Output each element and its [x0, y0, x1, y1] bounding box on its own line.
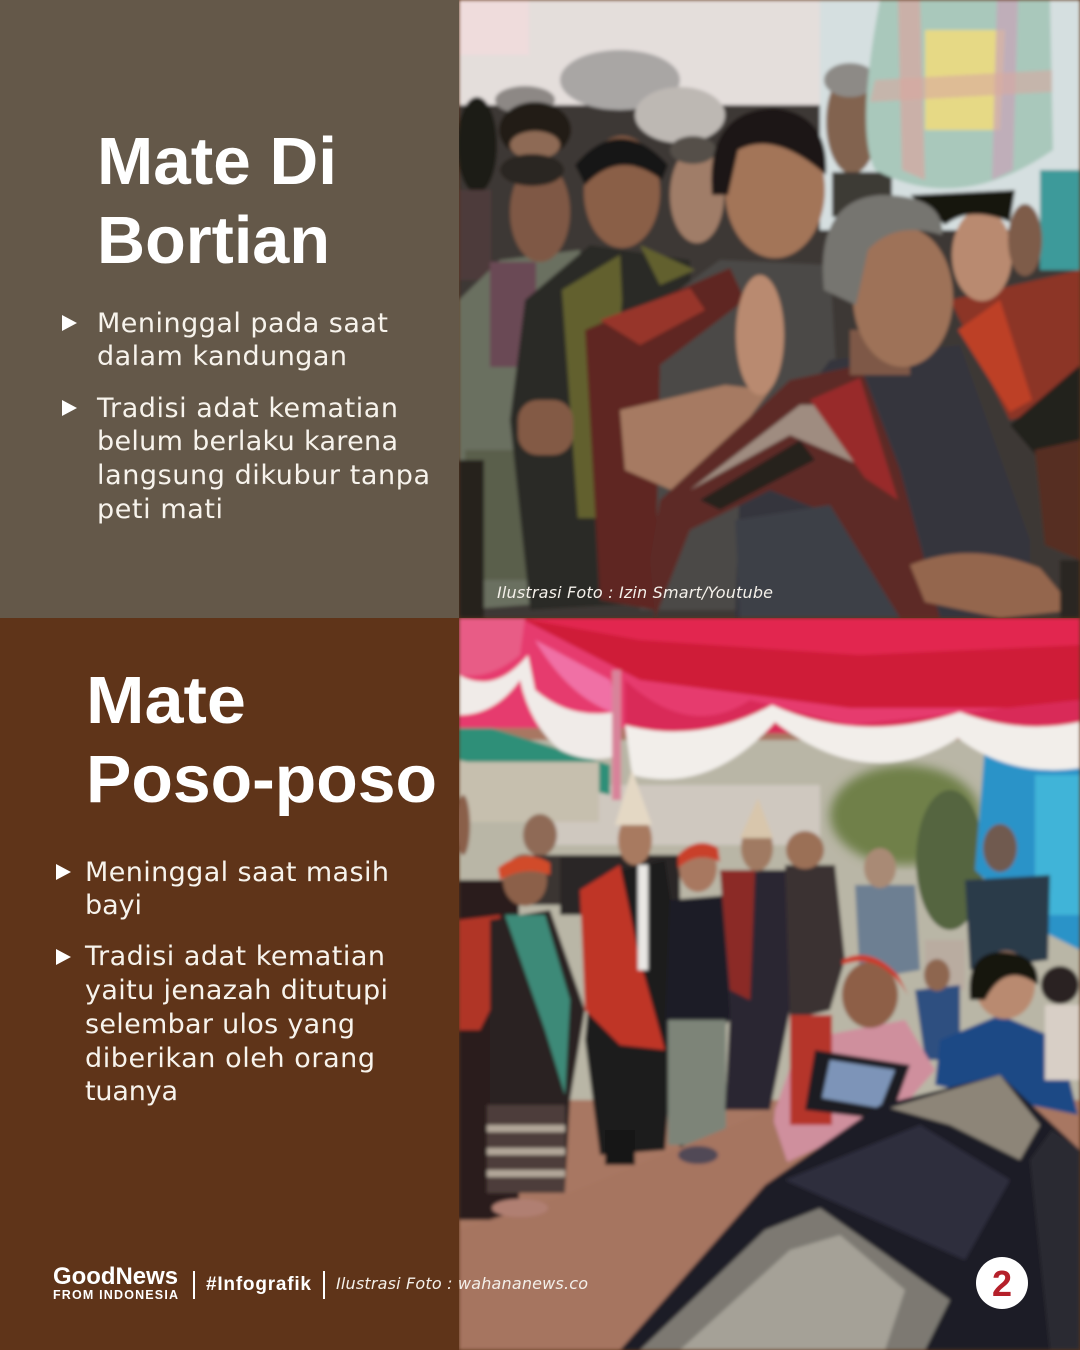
- woman in dark dress: [666, 894, 734, 1149]
- photo: mourners in ulos shawls: [457, 0, 1080, 618]
- title: Mate Poso-poso: Mate: [86, 663, 246, 738]
- logo: GoodNews from Indonesia: FROM INDONESIA: [53, 1288, 178, 1302]
- seated women: [770, 1020, 935, 1170]
- bullet list: Mate Di Bortian: langsung dikubur tanpa: [97, 460, 430, 491]
- further mourners: [785, 865, 845, 1020]
- bullet list: Mate Di Bortian: Tradisi adat kematian: [96, 393, 398, 424]
- bullet list: Mate Di Bortian: belum berlaku karena: [97, 426, 398, 457]
- title: Mate Di Bortian: Mate Di: [97, 124, 337, 199]
- man in red jacket: [720, 870, 790, 1110]
- title: Mate Poso-poso: [86, 663, 437, 817]
- caption: photo source: Ilustrasi Foto : wahananews.co: [336, 1274, 588, 1293]
- footer: brand and credit: [53, 1263, 588, 1302]
- bullet list: Mate Poso-poso: tuanya: [85, 1076, 178, 1107]
- plaid bag: [866, 0, 1053, 188]
- logo: GoodNews from Indonesia: [53, 1263, 178, 1302]
- bullet list: Mate Di Bortian: peti mati: [97, 494, 223, 525]
- older man, striped shawl: [735, 359, 962, 614]
- bullet list: Mate Poso-poso: Meninggal saat masih: [85, 857, 389, 888]
- page number badge: [976, 1257, 1028, 1309]
- man in black suit, red shawl: [585, 860, 680, 1155]
- panel: Mate Poso-poso: [0, 618, 459, 1350]
- man in glasses, red shawl: [640, 260, 836, 610]
- coffin covered in ulos: [620, 1075, 1080, 1350]
- bullet list: Mate Di Bortian: Meninggal pada saat: [97, 308, 388, 339]
- left crowd: [459, 880, 519, 1220]
- woman at right: [950, 270, 1080, 420]
- bullet list: Mate Di Bortian: [62, 308, 430, 525]
- bullet list: Mate Poso-poso: selembar ulos yang: [85, 1009, 355, 1040]
- bullet list: Mate Poso-poso: Tradisi adat kematian: [84, 941, 385, 972]
- caption: photo credit: Ilustrasi Foto : Izin Smart/Youtube: [497, 583, 773, 602]
- bullet list: Mate Poso-poso: diberikan oleh orang: [85, 1043, 375, 1074]
- bullet list: Mate Poso-poso: bayi: [85, 890, 142, 921]
- page number badge: 2: [992, 1263, 1012, 1304]
- woman in teal shawl: [490, 910, 585, 1190]
- title: Mate Di Bortian: [97, 124, 337, 278]
- title: Mate Di Bortian: Bortian: [97, 203, 330, 278]
- panel: Mate Di Bortian: [0, 0, 459, 618]
- right edge: [1010, 365, 1080, 460]
- background men: [824, 90, 873, 176]
- title: Mate Poso-poso: Poso-poso: [86, 742, 437, 817]
- foliage and backdrop: [830, 765, 980, 865]
- bullet list: Mate Poso-poso: [56, 857, 389, 1107]
- left man, pale shirt: [459, 250, 590, 610]
- tent: [459, 619, 1004, 732]
- photo: family standing around the coffin: [456, 618, 1080, 1350]
- bullet list: Mate Di Bortian: dalam kandungan: [97, 341, 347, 372]
- hashtag: #Infografik: [206, 1274, 311, 1295]
- ground: [490, 1123, 788, 1222]
- middle man, olive scarf: [510, 245, 700, 610]
- bullet list: Mate Poso-poso: yaitu jenazah ditutupi: [85, 975, 388, 1006]
- logo: GoodNews from Indonesia: GoodNews: [53, 1263, 178, 1290]
